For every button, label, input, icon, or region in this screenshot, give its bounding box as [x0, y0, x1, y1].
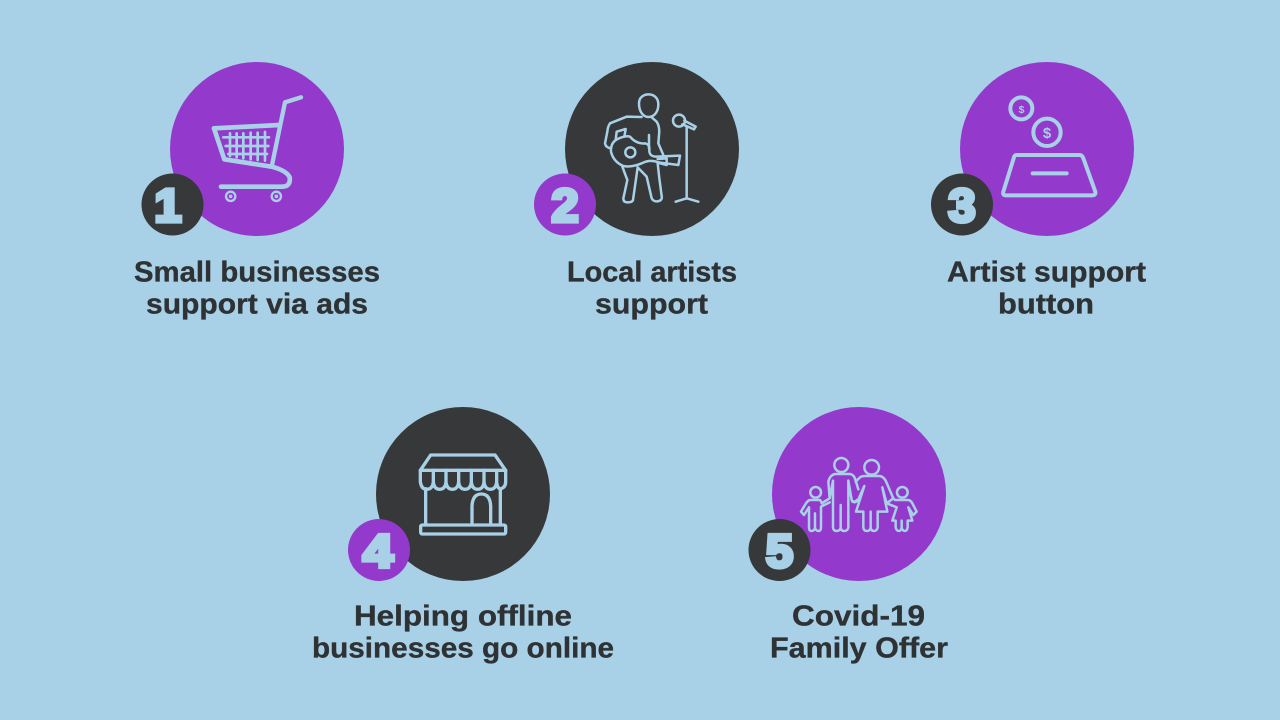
icon: dollar signs on coins: $: [1019, 104, 1025, 116]
icon: coins dropping into slot: [1003, 97, 1095, 195]
label: small businesses support via ads: support via ads: [146, 288, 368, 320]
icon: dollar signs on coins: $: [1043, 125, 1052, 142]
icon: storefront: [420, 455, 506, 534]
badge: number 1: [142, 174, 204, 236]
label: local artists support: Local artists: [567, 256, 737, 288]
label: small businesses support via ads: Small businesses: [134, 256, 380, 288]
badge: number 3: [931, 174, 993, 236]
circle: item 4: [376, 407, 550, 581]
label: small businesses support via ads: [134, 256, 380, 320]
panel: item 1 small businesses: [134, 62, 380, 320]
icon: family holding hands: [801, 458, 917, 531]
badge: number 5: 5: [766, 525, 793, 577]
badge: number 2: [534, 174, 596, 236]
label: helping offline businesses go online: businesses go online: [312, 632, 614, 664]
label: artist support button: button: [998, 288, 1094, 320]
icon: shopping cart: [214, 97, 301, 201]
circle: item 1: [170, 62, 344, 236]
panel: item 3 artist support button: [931, 62, 1147, 320]
label: artist support button: Artist support: [947, 256, 1147, 288]
badge: number 1: 1: [154, 180, 182, 232]
badge: number 3: 3: [948, 180, 976, 232]
label: covid-19 family offer: Covid-19: [792, 600, 925, 632]
circle: item 3: [960, 62, 1134, 236]
label: helping offline businesses go online: [312, 600, 614, 664]
badge: number 2: 2: [552, 180, 578, 232]
badge: number 4: [348, 519, 410, 581]
circle: item 5: [772, 407, 946, 581]
label: local artists support: support: [595, 288, 709, 320]
label: local artists support: [567, 256, 737, 320]
badge: number 5: [748, 519, 810, 581]
label: covid-19 family offer: [770, 600, 948, 664]
panel: item 4 offline businesses: [312, 407, 614, 664]
label: covid-19 family offer: Family Offer: [770, 632, 948, 664]
label: helping offline businesses go online: Helping offline: [354, 600, 572, 632]
circle: item 2: [565, 62, 739, 236]
icon: dollar signs on coins: [1019, 104, 1052, 142]
icon: guitarist with microphone: [605, 94, 698, 202]
panel: item 2 local artists: [534, 62, 739, 320]
label: artist support button: [947, 256, 1147, 320]
badge: number 4: 4: [363, 525, 393, 577]
panel: item 5 family offer: [748, 407, 948, 664]
